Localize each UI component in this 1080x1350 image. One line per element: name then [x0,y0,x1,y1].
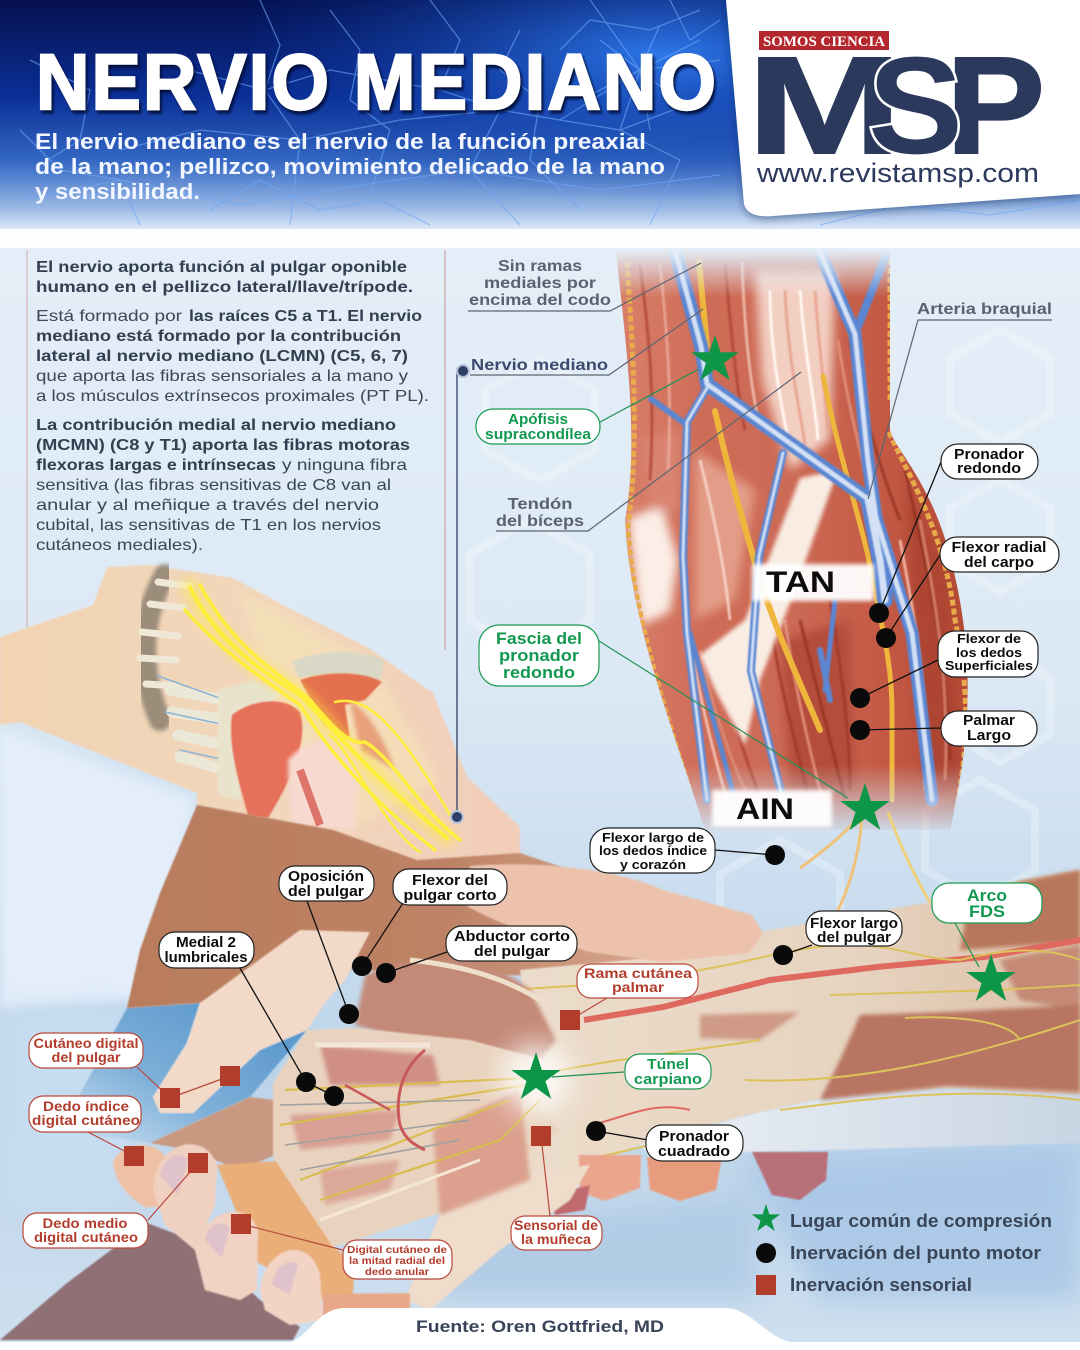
subtitle [35,129,665,204]
background hexagon pattern [470,330,1050,974]
radial artery [584,940,1080,1020]
scapula [218,680,280,800]
label: nervio mediano [470,309,703,375]
label: flexor radial del carpo: Flexor radial [952,540,1046,556]
legend motor dot [756,1243,776,1263]
label: flexor largo del pulgar: Flexor largo [810,916,898,932]
illustration: AIN label: AIN [736,793,794,826]
illustration: anatomical forearm [500,870,1080,1180]
label: tendon del biceps: del bíceps [496,513,584,530]
blue wedge under thumb [60,1003,307,1143]
label: digital cutaneo de la mitad radial: dedo anular [365,1266,429,1278]
illustration: elbow and forearm anatomy [616,250,968,830]
label: flexor de los dedos superficiales: los dedos [956,645,1022,660]
label: dedo medio digital cutaneo: digital cutáneo [34,1229,138,1245]
pin top [457,365,469,377]
label: flexor largo de los dedos: y corazón [620,857,686,872]
logo tag: somos ciencia: SOMOS CIENCIA [763,34,885,50]
label: abductor corto del pulgar: Abductor corto [454,929,570,945]
label: flexor largo del pulgar [806,911,902,946]
left text column: flexoras largas e intrínsecas [36,457,276,474]
pale muscle zones [628,270,960,790]
logo panel [726,0,1080,216]
white cuff [640,1088,1080,1155]
label: arteria braquial [868,301,1052,499]
label: tunel carpiano [625,1054,711,1089]
label: palmar largo: Palmar [963,713,1015,729]
label: nervio mediano: Nervio mediano [471,357,608,374]
illustration: palm anatomy [273,1028,570,1247]
label: flexor de los dedos superficiales: Superficiales [945,658,1033,673]
label: tendon del biceps [496,372,801,531]
label: digital cutaneo de la mitad radial: Digital cutáneo de [347,1244,447,1256]
nails [160,1155,188,1195]
legend: Inervación del punto motor [790,1243,1041,1263]
label: apofisis supracondilea: supracondílea [485,426,592,443]
label: abductor corto del pulgar: del pulgar [474,944,550,960]
illustration: closed fist [465,864,763,962]
label: pronador cuadrado: Pronador [659,1129,729,1145]
illustration: brown forearm [127,805,660,1008]
label: medial 2 lumbricales: lumbricales [164,950,248,966]
label: tunel carpiano: carpiano [634,1071,702,1088]
label: arco FDS: FDS [969,902,1005,921]
label: pronador cuadrado: cuadrado [658,1144,730,1160]
left text column: (MCMN) (C8 y T1) aporta las fibras motoras [36,437,410,454]
label: oposicion del pulgar: Oposición [288,869,364,885]
left text column: Está formado por [36,308,183,325]
label: tunel carpiano: Túnel [647,1056,689,1073]
white band under header [0,229,1080,248]
label: sin ramas: mediales por [484,275,596,292]
subtitle: El nervio mediano es el nervio de la función preaxial [35,129,646,154]
logo wordmark: MSP: S [868,29,963,183]
label: flexor de los dedos superficiales: Flexor de [957,631,1021,646]
label: flexor del pulgar corto [393,869,507,905]
muscle fibres [640,262,950,810]
left text column: a los músculos extrínsecos proximales (PT PL). [36,388,429,405]
yellow nerves [699,262,892,800]
connector line: nervio mediano pin [451,365,469,823]
left text column: El nervio aporta función al pulgar oponible [36,259,407,276]
illustration: TAN label: TAN [766,566,835,599]
illustration: AIN label [712,790,832,827]
label: arteria braquial: Arteria braquial [917,301,1052,318]
forearm nerves [510,945,1080,1160]
collarbone [293,652,384,680]
left text column [36,259,429,554]
subtitle: y sensibilidad. [35,179,200,204]
label: dedo medio digital cutaneo [23,1213,148,1248]
yellow nerves glow [185,585,460,852]
label: sin ramas [468,258,701,311]
subtitle: de la mano; pellizco, movimiento delicado de la mano [35,154,665,179]
label: palmar largo [941,711,1037,746]
electric nerve pattern [20,0,1080,225]
label: sensorial de la muneca: la muñeca [521,1231,591,1247]
label: sensorial de la muneca [511,1216,602,1250]
label: palmar largo: Largo [967,728,1011,744]
illustration: shoulder with glowing nerves [0,565,520,862]
legend sensory square [756,1275,776,1295]
skin edge nerves [627,250,966,810]
blue veins [651,250,932,800]
label: rama cutanea palmar [577,964,698,998]
label: fascia del pronador redondo: pronador [499,646,579,665]
label: flexor largo de los dedos [590,828,715,873]
legend [752,1204,1052,1295]
label: digital cutaneo de la mitad radial [343,1240,452,1279]
upper arm pink [288,739,360,830]
label: sin ramas: encima del codo [469,292,611,309]
illustration: TAN label [752,564,874,601]
left text column: cubital, las sensitivas de T1 en los nervios [36,517,381,534]
illustration: thenar muscle [355,959,556,1060]
label: apofisis supracondilea [476,409,600,444]
label: pronador cuadrado [646,1125,743,1161]
left text column: lateral al nervio mediano (LCMN) (C5, 6, 7) [36,348,408,365]
label: flexor largo de los dedos: los dedos índice [599,843,707,858]
label: flexor radial del carpo [940,537,1059,572]
legend star [752,1204,780,1231]
label: cutaneo digital del pulgar: Cutáneo digital [34,1035,138,1051]
illustration: lower hand and fingers [0,1097,828,1340]
source footer: Fuente: Oren Gottfried, MD [416,1317,664,1336]
legend: Lugar común de compresión [790,1211,1052,1231]
illustration: lower nerve branches [800,812,975,970]
left text column: humano en el pellizco lateral/llave/trípode. [36,279,413,296]
shoulder muscle [231,701,302,818]
label: dedo indice digital cutaneo: Dedo índice [43,1098,129,1114]
label: flexor radial del carpo: del carpo [964,555,1034,571]
label: oposicion del pulgar: del pulgar [288,884,364,900]
label: fascia del pronador redondo [479,625,599,686]
compression stars [511,335,1016,1099]
label: arco FDS: Arco [967,886,1007,905]
label: arco FDS [932,883,1042,923]
label: dedo indice digital cutaneo: digital cutáneo [32,1112,140,1128]
motor point markers [296,603,896,1141]
source footer [0,1308,1080,1350]
logo wordmark: MSP: M [747,29,902,183]
label: medial 2 lumbricales [159,932,254,968]
left text column: anular y al meñique a través del nervio [36,497,379,514]
logo wordmark: MSP [747,29,1045,183]
label: pronador redondo [941,444,1038,479]
logo wordmark: MSP: P [946,29,1045,183]
label: pronador redondo: Pronador [954,447,1024,463]
label: sin ramas: Sin ramas [498,258,582,275]
label: rama cutanea palmar: palmar [612,979,665,995]
label: digital cutaneo de la mitad radial: la mitad radial del [349,1255,445,1267]
label: sensorial de la muneca: Sensorial de [514,1217,598,1233]
left text column: La contribución medial al nervio mediano [36,417,396,434]
connector lines [88,369,979,1250]
illustration: pointing thumb [153,930,370,1113]
label: medial 2 lumbricales: Medial 2 [176,935,236,951]
ribs and spine [140,575,225,770]
white tendon [700,470,838,745]
label: rama cutanea palmar: Rama cutánea [584,965,692,981]
left text column: las raíces C5 a T1. El nervio [189,308,422,325]
left text column: que aporta las fibras sensoriales a la mano y [36,368,408,385]
label: cutaneo digital del pulgar: del pulgar [52,1049,121,1065]
logo url: www.revistamsp.com [756,158,1039,188]
label: apofisis supracondilea: Apófisis [508,411,568,428]
left text column: mediano está formado por la contribución [36,328,401,345]
label: fascia del pronador redondo: Fascia del [496,629,582,648]
left text column: cutáneos mediales). [36,537,203,554]
header banner [0,0,1080,230]
title: NERVIO MEDIANO [36,39,716,127]
label: flexor largo de los dedos: Flexor largo de [602,830,704,845]
label: pronador redondo: redondo [957,461,1021,477]
illustration: backdrop blue shading [0,730,1080,1300]
label: oposicion del pulgar [279,866,374,901]
gray labels [468,258,1052,531]
left text column: sensitiva (las fibras sensitivas de C8 van al [36,477,391,494]
forearm muscles [700,870,1080,1100]
label: fascia del pronador redondo: redondo [503,663,575,682]
label: abductor corto del pulgar [446,926,577,961]
label: flexor de los dedos superficiales [938,631,1038,677]
left text column: y ninguna fibra [282,457,407,474]
sensory markers [124,1010,580,1234]
pin bottom [451,811,463,823]
label: flexor largo del pulgar: del pulgar [817,930,891,946]
label: cutaneo digital del pulgar [29,1033,143,1068]
pale neck and arm glow [240,590,440,830]
label: flexor del pulgar corto: pulgar corto [404,888,497,904]
label: dedo indice digital cutaneo [29,1096,141,1132]
label: flexor del pulgar corto: Flexor del [412,873,488,889]
label: tendon del biceps: Tendón [508,496,572,513]
legend: Inervación sensorial [790,1275,972,1295]
label: dedo medio digital cutaneo: Dedo medio [42,1215,128,1231]
